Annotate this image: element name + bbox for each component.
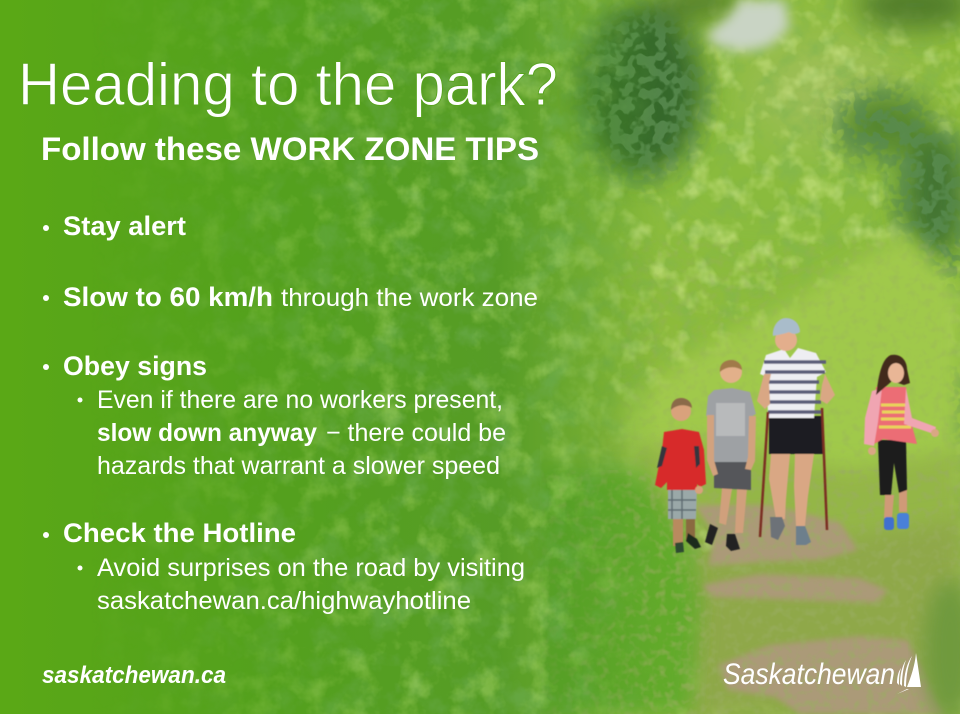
person: woman with walking poles (757, 318, 835, 545)
tip: check the hotline: saskatchewan.ca/highwayhotline (97, 587, 471, 615)
green overlay panel (0, 0, 660, 714)
website footer: saskatchewan.ca (42, 662, 226, 689)
logo: Saskatchewan: Saskatchewan (723, 658, 895, 691)
tip: obey signs: Obey signs (63, 351, 207, 381)
foreground shrubs, left (540, 470, 700, 714)
tip: obey signs: slow down anyway (97, 419, 317, 447)
tip: obey signs (43, 351, 506, 480)
tip: obey signs: − there could be (326, 419, 506, 447)
subtitle: Follow these WORK ZONE TIPS (41, 131, 539, 167)
tip: stay alert: Stay alert (63, 211, 186, 241)
tip: slow to 60 km/h (43, 282, 538, 312)
tip: obey signs: Even if there are no workers present, (97, 386, 503, 414)
lower grass (690, 520, 960, 714)
people on the trail (655, 318, 939, 553)
grass hillside (620, 232, 960, 540)
person: girl in pink jacket (864, 355, 939, 530)
person: older boy in grey t-shirt (705, 360, 756, 551)
tip: check the hotline (43, 518, 525, 615)
blurred foreground leaf, right (924, 580, 960, 714)
tip: obey signs: hazards that warrant a slower speed (97, 452, 500, 480)
shrubs texture (540, 0, 960, 714)
tip: slow to 60 km/h: through the work zone (281, 284, 538, 312)
photo background: park trail (460, 0, 960, 714)
tip: check the hotline: Check the Hotline (63, 518, 296, 548)
sky gap (705, 0, 790, 52)
title: Heading to the park? (18, 50, 558, 118)
tip: slow to 60 km/h: Slow to 60 km/h (63, 282, 273, 312)
fine grass and gravel texture (540, 470, 960, 714)
dirt path (695, 505, 945, 714)
tip: check the hotline: Avoid surprises on the road by visiting (97, 554, 525, 582)
person: young boy in red jacket (655, 398, 706, 553)
dark tree canopy (578, 0, 960, 260)
